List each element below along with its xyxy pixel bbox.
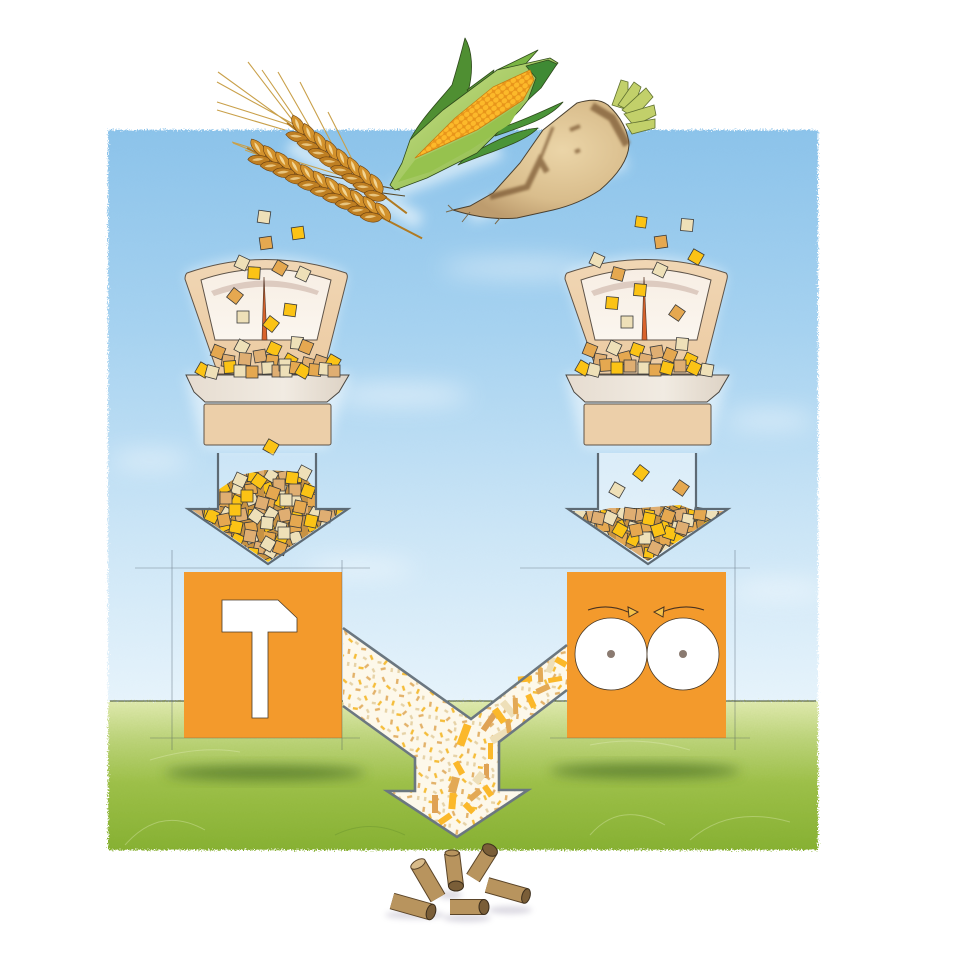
icon: hammer bbox=[222, 600, 297, 718]
grass strokes bbox=[125, 741, 790, 845]
background: sky bbox=[108, 130, 818, 705]
merging Y arrow bbox=[343, 628, 568, 837]
corn back leaves bbox=[410, 38, 563, 165]
crop glow bbox=[290, 145, 625, 222]
scale tray bbox=[186, 375, 349, 402]
corn kernels bbox=[415, 70, 534, 158]
left down arrow with cube pile bbox=[186, 453, 350, 565]
left weighing scale bbox=[185, 210, 349, 455]
falling and piled cubes on scale bbox=[195, 210, 341, 455]
beet blemishes bbox=[490, 106, 627, 197]
coarse particles bbox=[432, 656, 568, 825]
arrow outline bbox=[343, 628, 567, 837]
wheat ear lower bbox=[242, 138, 427, 247]
scale dial bbox=[581, 269, 711, 340]
beet root bbox=[453, 100, 629, 219]
icon: rollers bbox=[575, 618, 719, 690]
construction lines bbox=[520, 550, 750, 750]
pellets bbox=[392, 841, 532, 921]
wheat awns bbox=[217, 62, 405, 196]
scale glow bbox=[565, 256, 729, 447]
icon: rotation arrows bbox=[588, 607, 704, 617]
right weighing scale bbox=[565, 216, 729, 447]
arrow interior bbox=[186, 453, 350, 565]
icon: corn cob bbox=[390, 38, 563, 190]
beet rootlets bbox=[446, 205, 500, 224]
right down arrow with cube pile bbox=[566, 453, 730, 565]
meadow shadows bbox=[165, 764, 740, 780]
beet leaves bbox=[612, 80, 656, 134]
scale face bbox=[565, 260, 727, 374]
clouds bbox=[110, 260, 830, 598]
arrow outline bbox=[188, 453, 348, 564]
hammer mill box bbox=[135, 550, 370, 750]
scale face bbox=[185, 260, 347, 374]
falling cubes bbox=[609, 465, 689, 498]
pile bbox=[572, 505, 724, 561]
scale glow bbox=[185, 256, 349, 447]
icon: feed pellets bbox=[385, 841, 532, 922]
scale dial bbox=[201, 269, 331, 340]
construction lines bbox=[135, 550, 370, 750]
arrow interior bbox=[566, 453, 730, 565]
arrow outline bbox=[568, 453, 728, 564]
icon: wheat bbox=[217, 62, 427, 247]
pellet shadows bbox=[385, 891, 532, 922]
pile bbox=[192, 465, 344, 562]
falling and piled cubes on scale bbox=[575, 216, 714, 377]
scale base bbox=[204, 404, 331, 445]
roller mill box bbox=[520, 550, 750, 750]
scale base bbox=[584, 404, 711, 445]
background: meadow bbox=[108, 701, 818, 850]
corn husk bbox=[390, 58, 558, 190]
icon: sugar beet bbox=[446, 80, 656, 224]
scale tray bbox=[566, 375, 729, 402]
wheat ear upper bbox=[281, 114, 413, 222]
arrow fill with fine particles bbox=[343, 628, 567, 837]
